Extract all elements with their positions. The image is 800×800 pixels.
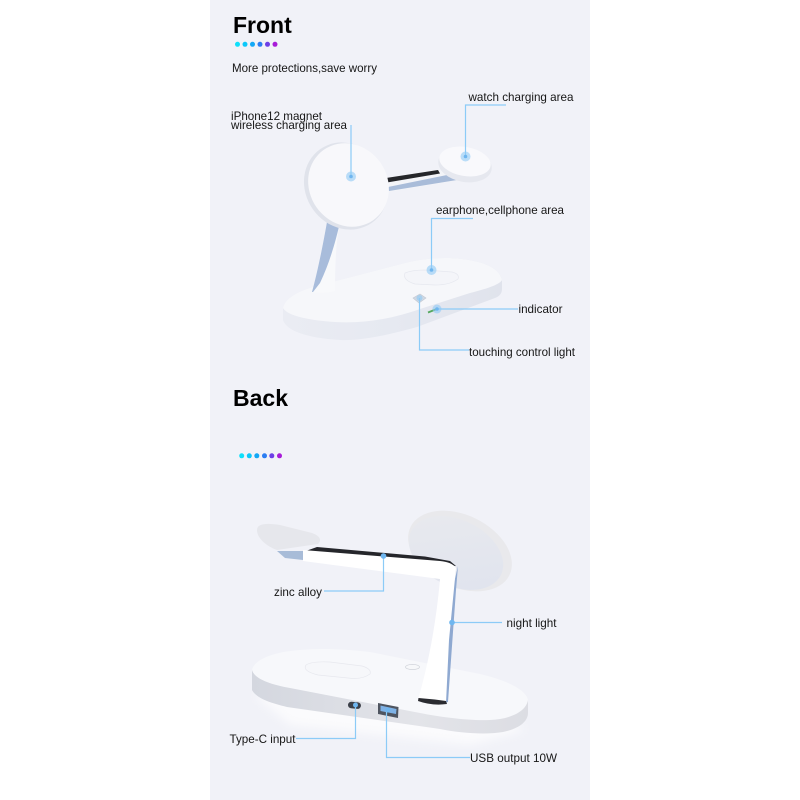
decorative dots: Back [239,453,282,458]
callout: indicator [432,302,563,316]
callout: zinc alloy [274,553,386,599]
touch button [413,294,426,303]
indicator light [428,308,438,312]
USB port [378,703,398,718]
charging pad outline [404,270,458,285]
charging pad outline [305,662,370,678]
touch icon [406,664,420,670]
callout: Type-C input [230,702,358,746]
arm [303,547,458,705]
large magnetic disc [287,126,405,246]
callout: zinc alloy: zinc alloy [274,585,322,599]
callout: earphone, cellphone area [426,203,564,275]
watch disc [435,143,495,186]
callout: earphone, cellphone area: earphone,cellphone area [436,203,564,217]
Type-C port [348,701,361,709]
product: front view charger [283,126,502,340]
callout: indicator: indicator [518,302,563,316]
base [252,649,528,733]
callout: USB output 10W [386,708,558,765]
large disc [395,495,525,607]
stem [312,216,340,293]
arm [384,169,458,192]
reflection [255,690,525,745]
callout: USB output 10W: USB output 10W [470,751,558,765]
heading: Back: Back [233,385,288,411]
callout: night light: night light [506,616,557,630]
callout: watch charging area [460,90,574,162]
callout: iPhone12 magnet wireless charging area [230,109,356,182]
callout: night light [449,616,557,630]
callout: touching control light: touching control light [469,345,576,359]
base [283,258,502,340]
heading: Front: Front [233,12,292,38]
callout: iPhone12 magnet wireless charging area: iPhone12 magnet [231,109,323,123]
background panel [210,0,590,800]
callout: watch charging area: watch charging area [468,90,574,104]
callout: Type-C input: Type-C input [230,732,296,746]
product: back view charger [252,495,528,745]
callout: iPhone12 magnet wireless charging area: wireless charging area [230,118,347,132]
small watch pod [257,524,320,560]
callout: touching control light [416,295,576,359]
decorative dots: Front [235,42,278,47]
subtitle: More protections,save worry [232,61,377,75]
